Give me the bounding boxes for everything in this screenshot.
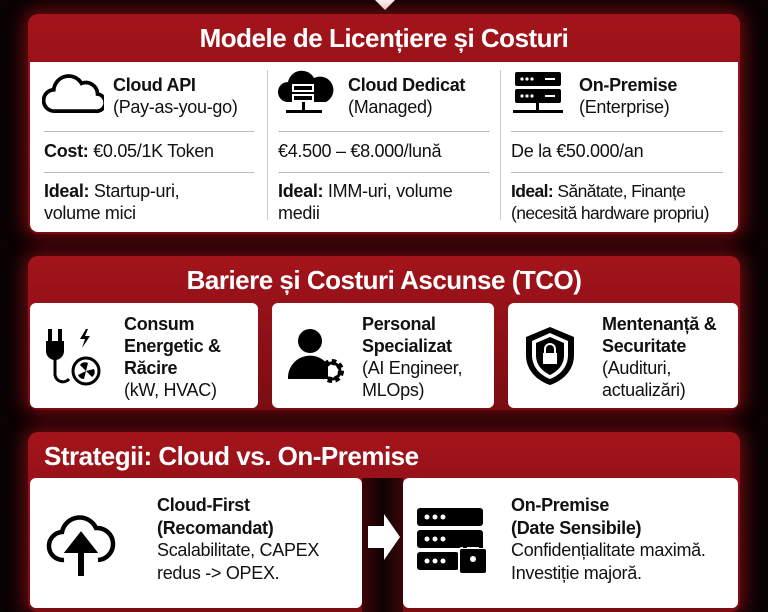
icon: server rack bbox=[513, 72, 563, 113]
column: Cloud API: Cloud API bbox=[113, 75, 196, 95]
column: Cloud Dedicat: (Managed) bbox=[348, 97, 432, 117]
card: maintenance: Mentenanță & bbox=[602, 314, 716, 334]
card: personnel: Personal bbox=[362, 314, 436, 334]
column: Cloud API: volume mici bbox=[44, 203, 136, 223]
card: personnel: Specializat bbox=[362, 336, 452, 356]
card: energy bbox=[30, 303, 258, 408]
column: On-Premise: De la €50.000/an bbox=[511, 141, 643, 161]
card: cloud-first: Cloud-First bbox=[157, 495, 250, 515]
card: personnel: (AI Engineer, bbox=[362, 358, 462, 378]
card: cloud-first: redus -> OPEX. bbox=[157, 562, 279, 582]
icon: person with gear bbox=[288, 329, 344, 383]
column: Cloud Dedicat: medii bbox=[278, 203, 320, 223]
column: Cloud Dedicat: Cloud Dedicat bbox=[348, 75, 465, 95]
card: personnel bbox=[272, 303, 494, 408]
icon: server with lock bbox=[417, 508, 486, 573]
card: maintenance: Securitate bbox=[602, 336, 686, 356]
arrow bbox=[368, 514, 400, 560]
icon: cloud server bbox=[278, 70, 334, 113]
column: Cloud Dedicat: Ideal: IMM-uri, volume bbox=[278, 181, 452, 201]
column: On-Premise bbox=[511, 72, 723, 223]
icon: shield lock bbox=[526, 327, 574, 385]
body bbox=[30, 62, 738, 232]
card: energy: Răcire bbox=[124, 358, 177, 378]
column: Cloud Dedicat: €4.500 – €8.000/lună bbox=[278, 141, 441, 161]
card: maintenance: actualizări) bbox=[602, 380, 685, 400]
card: on-premise bbox=[403, 478, 738, 608]
column: On-Premise: On-Premise bbox=[579, 75, 677, 95]
heading: Strategii: Cloud vs. On-Premise bbox=[44, 441, 419, 471]
column: Cloud API: Ideal: Startup-uri, bbox=[44, 181, 179, 201]
heading: Bariere și Costuri Ascunse (TCO) bbox=[187, 265, 581, 295]
icon: plug and fan bbox=[46, 329, 100, 386]
column: Cloud API bbox=[42, 74, 254, 223]
column: Cloud API: (Pay-as-you-go) bbox=[113, 97, 238, 117]
column: On-Premise: (Enterprise) bbox=[579, 97, 669, 117]
card: on-premise: Investiție majoră. bbox=[511, 562, 642, 582]
card: energy: (kW, HVAC) bbox=[124, 380, 217, 400]
card: maintenance bbox=[508, 303, 738, 408]
card: maintenance: (Audituri, bbox=[602, 358, 671, 378]
column: On-Premise: Ideal: Sănătate, Finanțe bbox=[511, 181, 685, 201]
column: Cloud Dedicat bbox=[278, 70, 490, 223]
card: energy: Consum bbox=[124, 314, 194, 334]
card: personnel: MLOps) bbox=[362, 380, 424, 400]
card: cloud-first bbox=[30, 478, 362, 608]
panel: strategies bbox=[28, 432, 740, 612]
card: cloud-first: Scalabilitate, CAPEX bbox=[157, 540, 319, 560]
card: on-premise: (Date Sensibile) bbox=[511, 518, 641, 538]
panel: licensing models bbox=[28, 14, 740, 234]
card: on-premise: Confidențialitate maximă. bbox=[511, 540, 706, 560]
card: cloud-first: (Recomandat) bbox=[157, 518, 273, 538]
icon: cloud upload bbox=[46, 515, 116, 576]
column: On-Premise: (necesită hardware propriu) bbox=[511, 203, 709, 223]
card: energy: Energetic & bbox=[124, 336, 221, 356]
top arrow bbox=[375, 0, 395, 10]
heading: Modele de Licențiere și Costuri bbox=[200, 23, 568, 53]
panel: hidden costs bbox=[28, 256, 740, 410]
card: on-premise: On-Premise bbox=[511, 495, 609, 515]
icon: cloud bbox=[42, 74, 104, 114]
column: Cloud API: Cost: €0.05/1K Token bbox=[44, 141, 214, 161]
